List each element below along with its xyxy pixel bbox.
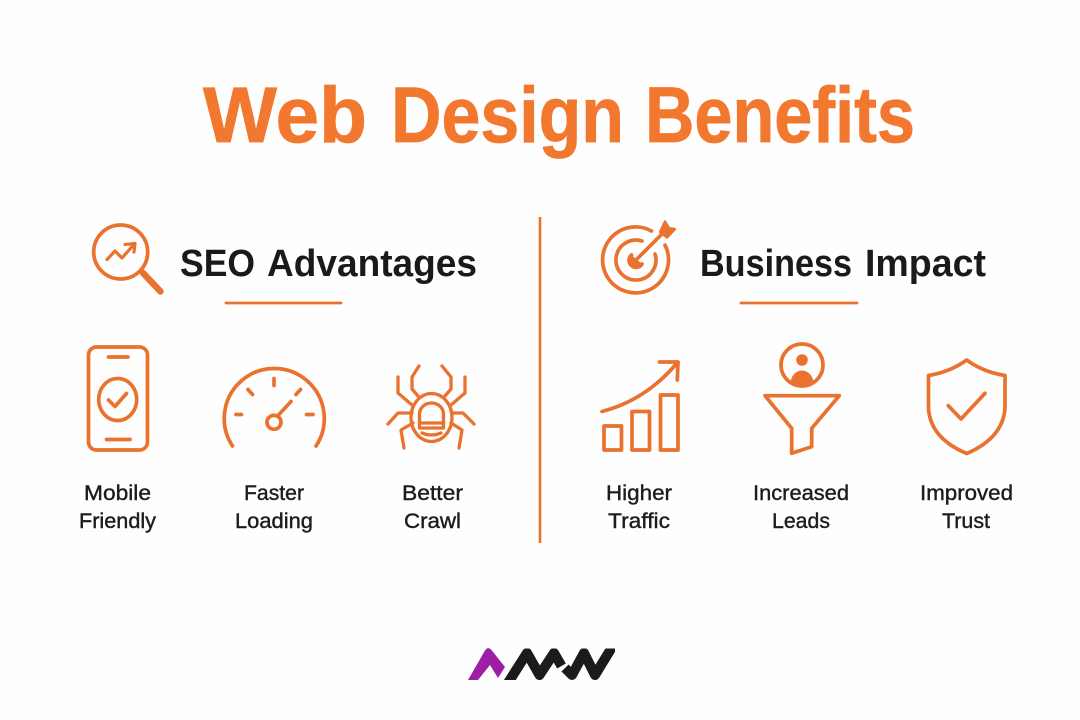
panel: business impact [602,222,1013,533]
logo [468,648,615,680]
label: Faster Loading: Loading [235,509,313,533]
heading: Business Impact: Impact [865,243,986,285]
icon: shield with check [928,360,1005,454]
label: Improved Trust [920,481,1013,533]
label: Increased Leads: Increased [753,481,849,505]
title: Benefits [645,70,915,159]
title: Web [203,70,367,159]
label: Improved Trust: Improved [920,481,1013,505]
label: Faster Loading: Faster [244,481,304,505]
icon: funnel with person [765,344,839,453]
icon: mobile phone with check [88,347,148,450]
icon: magnifier with trend [94,225,160,292]
heading underline [226,302,341,304]
icon: crawler spider [388,366,474,448]
label: Better Crawl [402,481,463,533]
center divider [539,217,541,543]
heading underline [741,302,857,304]
heading: SEO Advantages [180,243,477,285]
title: Design [391,70,624,159]
label: Higher Traffic [606,481,672,533]
icon: target with arrow [603,222,675,293]
label: Higher Traffic: Traffic [608,509,670,533]
label: Faster Loading [235,481,313,533]
label: Increased Leads: Leads [772,509,830,533]
label: Increased Leads [753,481,849,533]
label: Improved Trust: Trust [942,509,990,533]
heading: Business Impact: Business [700,243,852,285]
heading: SEO Advantages: Advantages [267,243,477,285]
label: Better Crawl: Better [402,481,463,505]
heading: SEO Advantages: SEO [180,243,255,285]
label: Mobile Friendly: Mobile [84,481,151,505]
logo: black zigzag [504,648,615,680]
label: Higher Traffic: Higher [606,481,672,505]
title [203,70,915,159]
heading: Business Impact [700,243,986,285]
icon: rising bars with arrow [602,362,678,450]
label: Mobile Friendly [79,481,156,533]
logo: purple peak [468,648,505,680]
icon: speed gauge [224,368,324,446]
label: Better Crawl: Crawl [404,509,461,533]
label: Mobile Friendly: Friendly [79,509,156,533]
panel: SEO advantages [79,225,477,533]
